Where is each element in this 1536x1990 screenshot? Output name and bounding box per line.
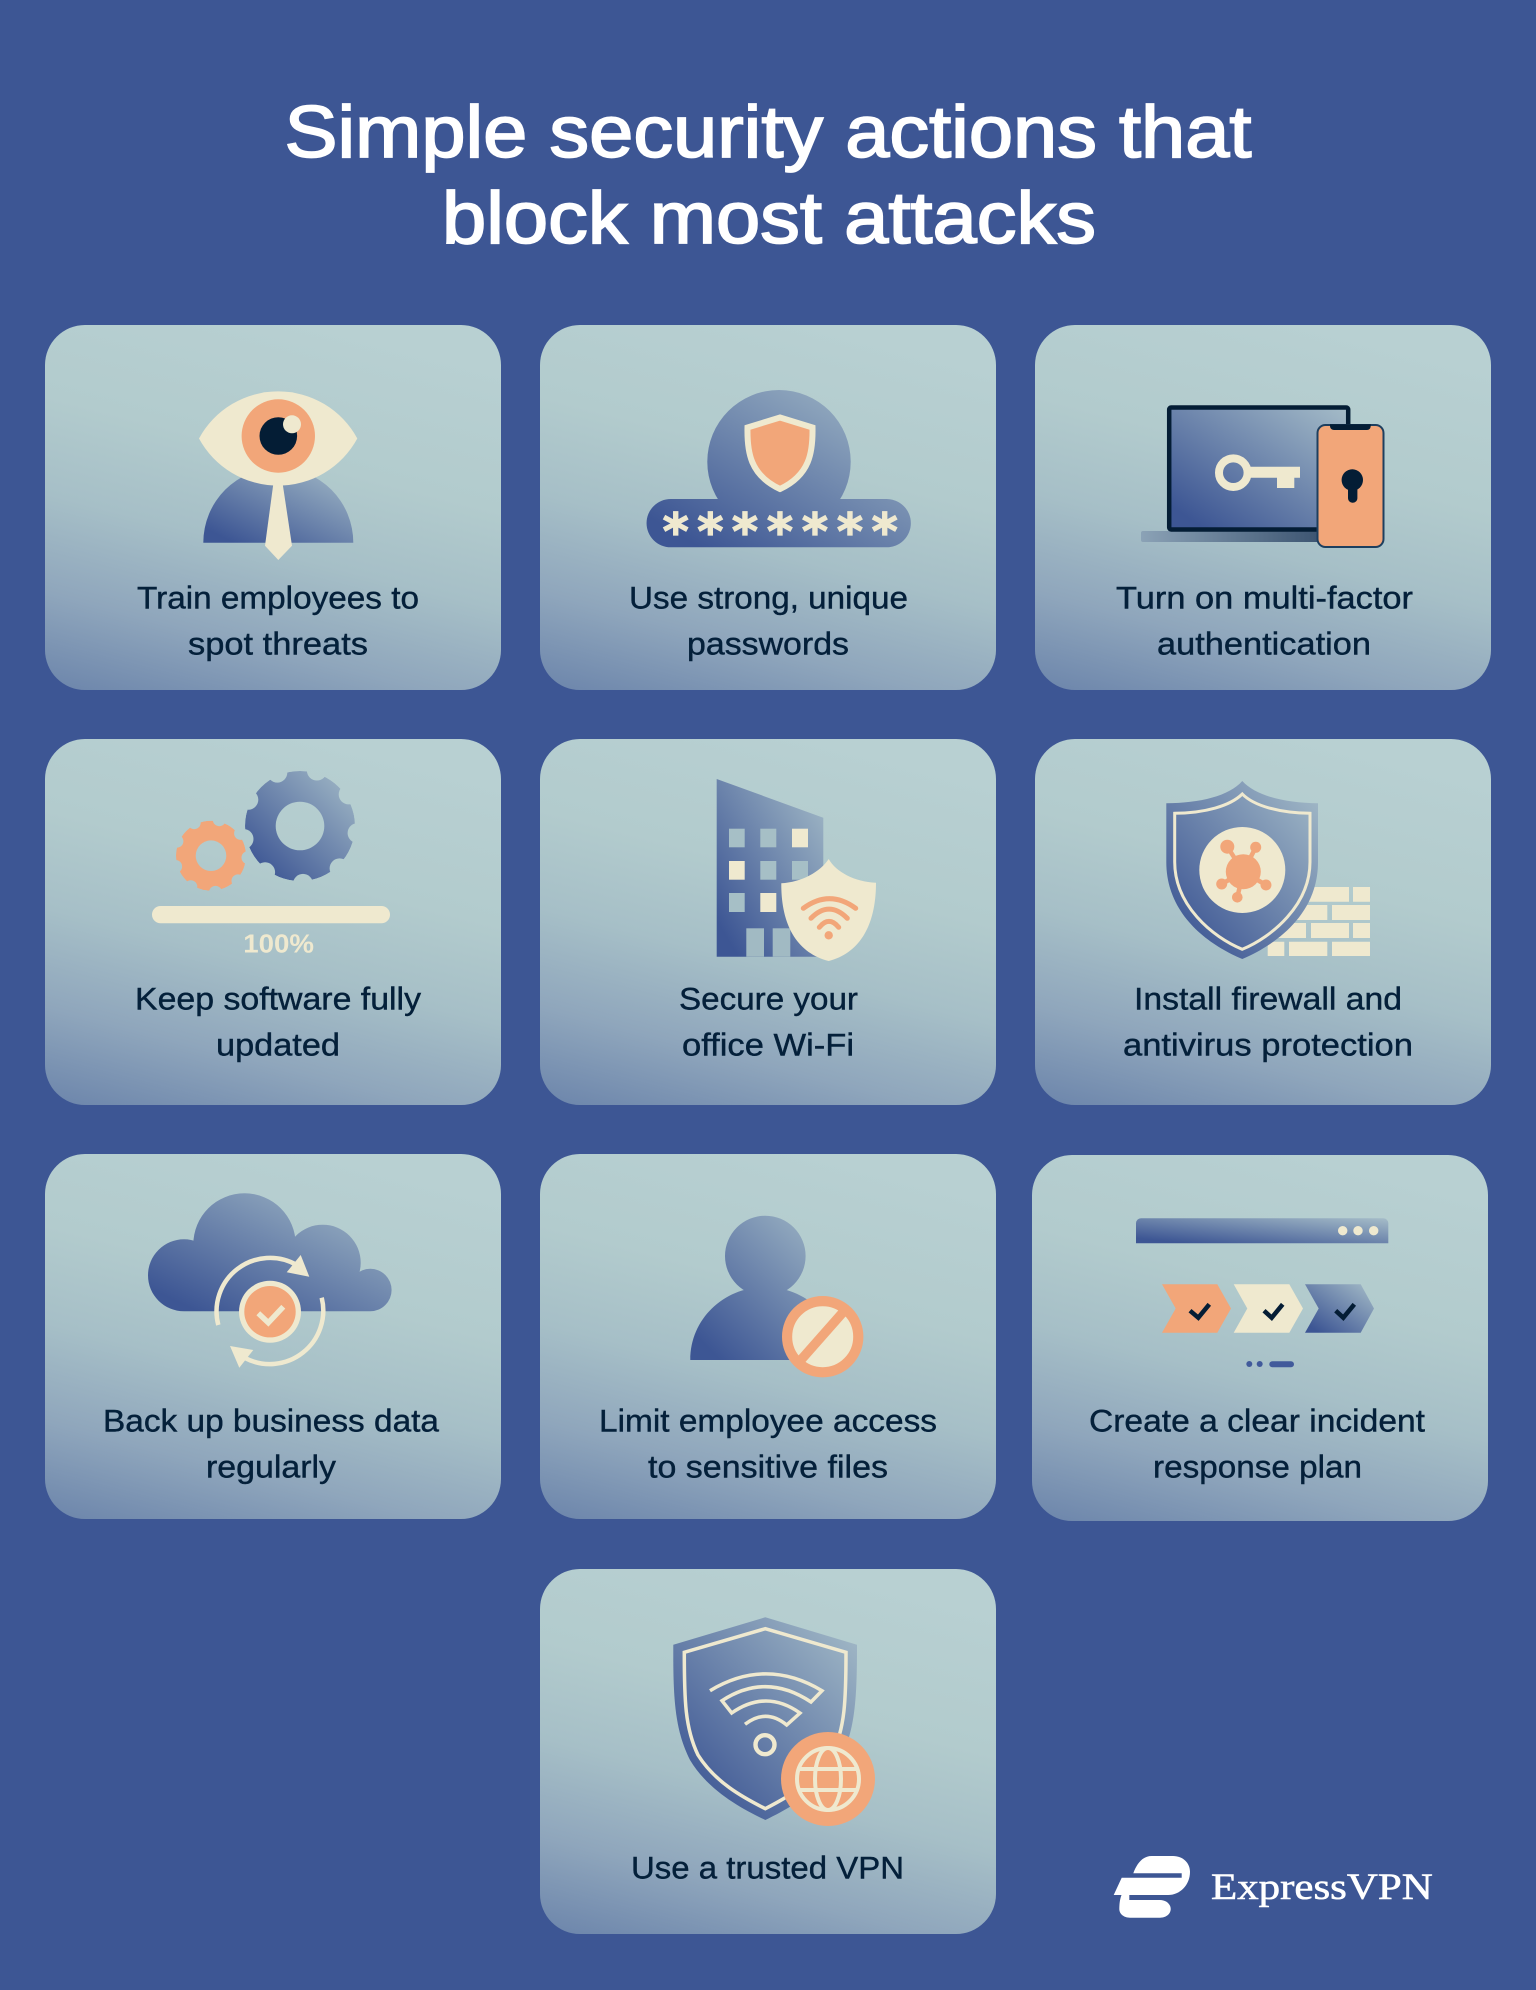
card background xyxy=(1035,739,1491,1105)
caption: updated xyxy=(216,1027,340,1063)
caption xyxy=(629,580,908,662)
icon: gears and progress bar xyxy=(152,771,390,959)
logo wordmark: ExpressVPN xyxy=(1211,1867,1433,1908)
caption: office Wi-Fi xyxy=(682,1027,854,1063)
caption: spot threats xyxy=(188,626,368,662)
card background xyxy=(1035,325,1491,690)
caption xyxy=(599,1403,937,1485)
caption xyxy=(137,580,419,662)
panel: software updates xyxy=(45,739,501,1105)
caption: Train employees to xyxy=(137,580,419,616)
panel: limit access xyxy=(540,1154,996,1519)
caption xyxy=(679,981,858,1063)
caption xyxy=(1116,580,1413,662)
caption: regularly xyxy=(206,1449,336,1485)
caption: Keep software fully xyxy=(135,981,421,1017)
icon: password field with shield xyxy=(647,390,911,561)
caption: Back up business data xyxy=(103,1403,439,1439)
logo: ExpressVPN xyxy=(1114,1856,1433,1918)
card background xyxy=(45,1154,501,1519)
panel: strong passwords xyxy=(540,325,996,690)
card background xyxy=(45,739,501,1105)
icon: cloud backup xyxy=(148,1193,392,1368)
panel: train employees xyxy=(45,325,501,690)
icon: user with prohibition sign xyxy=(690,1216,858,1372)
icon: gears and progress bar: 100% xyxy=(243,929,314,959)
caption xyxy=(1089,1403,1425,1485)
icon: checklist steps xyxy=(1136,1218,1388,1367)
card background xyxy=(540,1569,996,1934)
panel: trusted VPN xyxy=(540,1569,996,1934)
icon: Wi-Fi shield with globe xyxy=(673,1617,875,1826)
caption: Turn on multi-factor xyxy=(1116,580,1413,616)
card background xyxy=(540,739,996,1105)
card background xyxy=(540,1154,996,1519)
title: Simple security actions that xyxy=(284,92,1252,173)
icon: laptop with key and phone xyxy=(1141,408,1384,547)
caption: Install firewall and xyxy=(1134,981,1402,1017)
title: block most attacks xyxy=(442,178,1096,259)
caption: passwords xyxy=(687,626,849,662)
panel: firewall and antivirus xyxy=(1035,739,1491,1105)
caption xyxy=(1123,981,1413,1063)
caption: response plan xyxy=(1153,1449,1362,1485)
caption: Use a trusted VPN xyxy=(631,1850,904,1886)
caption: antivirus protection xyxy=(1123,1027,1413,1063)
caption xyxy=(103,1403,439,1485)
icon: eye with tie xyxy=(199,391,357,560)
icon: building with Wi-Fi shield xyxy=(717,779,876,961)
caption: Secure your xyxy=(679,981,858,1017)
panel: incident response plan xyxy=(1032,1155,1488,1521)
caption: Use strong, unique xyxy=(629,580,908,616)
card background xyxy=(1032,1155,1488,1521)
card background xyxy=(45,325,501,690)
caption: authentication xyxy=(1157,626,1371,662)
panel: multi-factor authentication xyxy=(1035,325,1491,690)
caption: to sensitive files xyxy=(648,1449,888,1485)
caption: Limit employee access xyxy=(599,1403,937,1439)
icon: shield, virus and brick wall xyxy=(1166,781,1370,959)
caption: Create a clear incident xyxy=(1089,1403,1425,1439)
icon: password field with shield: ******* xyxy=(663,503,898,561)
title xyxy=(284,92,1252,259)
logo mark xyxy=(1114,1856,1190,1918)
panel: office Wi-Fi xyxy=(540,739,996,1105)
panel: back up data xyxy=(45,1154,501,1519)
card background xyxy=(540,325,996,690)
caption xyxy=(135,981,421,1063)
